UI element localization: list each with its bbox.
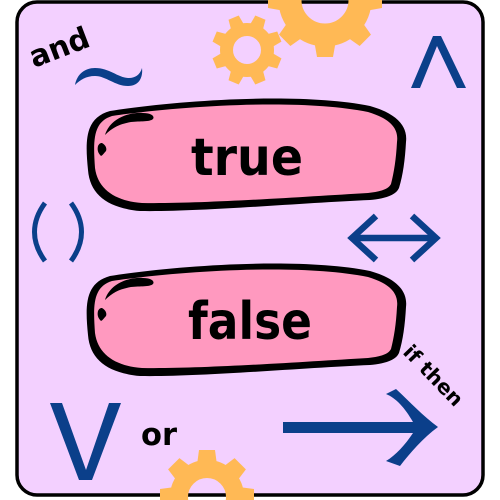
label: or: or xyxy=(141,417,178,453)
symbol: or vee xyxy=(50,403,121,480)
highlight dot xyxy=(98,308,106,321)
symbol: parentheses xyxy=(34,203,82,261)
icon: large gear xyxy=(268,0,382,57)
symbol: and wedge xyxy=(411,36,466,88)
highlight xyxy=(105,113,154,135)
symbol: right arrow xyxy=(283,389,438,466)
symbol: tilde xyxy=(75,68,142,86)
highlight xyxy=(105,278,154,300)
symbol: double arrow xyxy=(352,216,436,260)
text: false: false xyxy=(188,292,312,352)
highlight dot xyxy=(98,143,106,156)
text: true: true xyxy=(191,128,303,188)
button: false xyxy=(87,264,406,376)
label: and: and xyxy=(24,21,95,75)
button: true xyxy=(87,99,406,211)
icon: bottom gear xyxy=(160,450,254,500)
icon: small gear xyxy=(212,15,282,85)
label: if then: if then xyxy=(398,340,468,411)
